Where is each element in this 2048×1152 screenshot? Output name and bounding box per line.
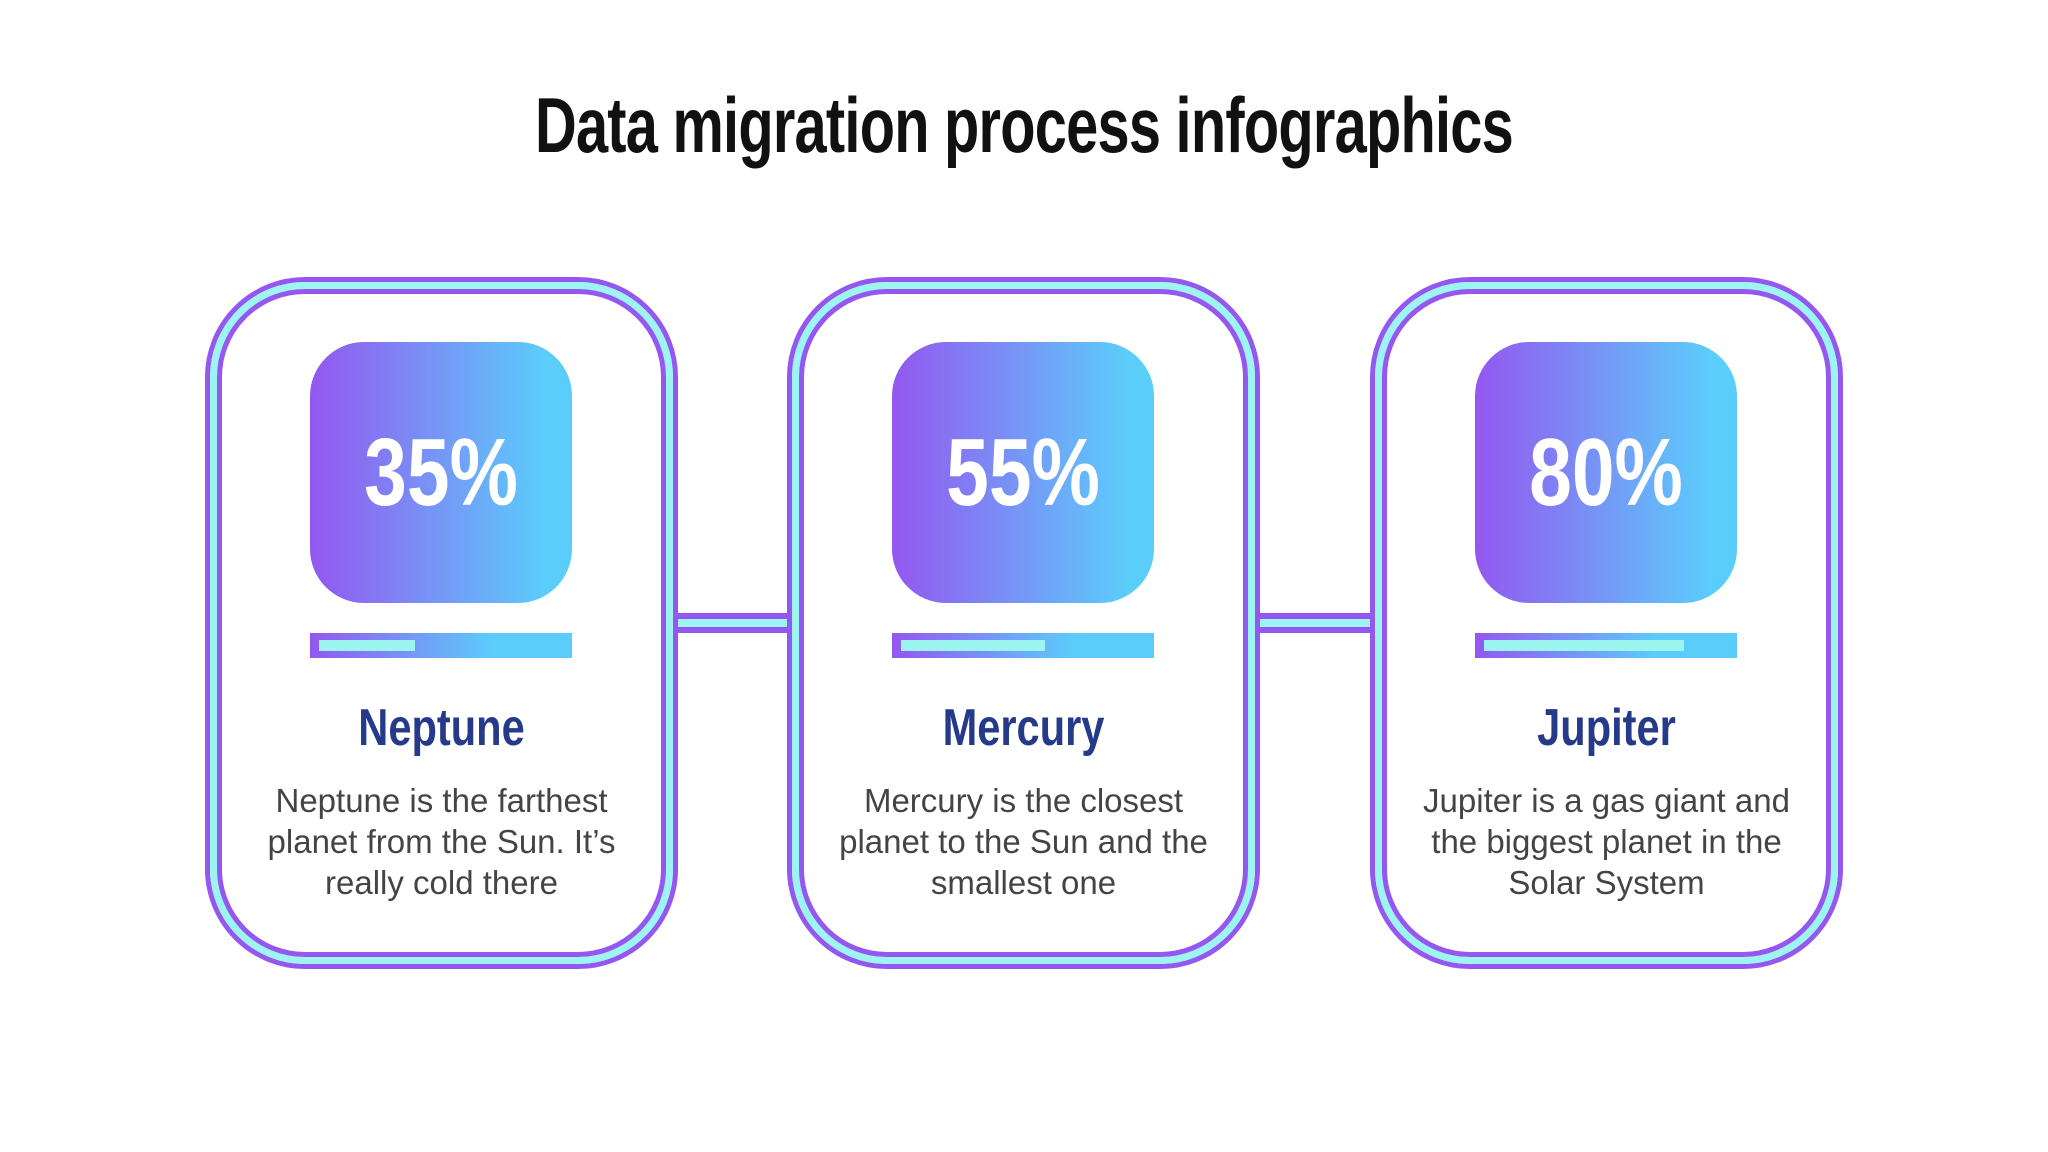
text: Neptune: Neptune is the farthest planet from the Sun. It’s really cold there bbox=[268, 782, 615, 901]
progress bar 55% bbox=[892, 633, 1154, 658]
percent box: 80%: 80% bbox=[1529, 419, 1683, 526]
heading: Mercury: Mercury bbox=[943, 699, 1104, 757]
panel: Neptune bbox=[205, 277, 678, 969]
panel: Jupiter bbox=[1370, 277, 1843, 969]
percent box: 80% bbox=[1475, 342, 1737, 603]
panel: Mercury bbox=[787, 277, 1260, 969]
percent box: 35% bbox=[310, 342, 572, 603]
progress bar 80% bbox=[1475, 633, 1737, 658]
heading: Neptune: Neptune bbox=[358, 699, 525, 757]
connector 1 bbox=[670, 613, 795, 633]
percent box: 35%: 35% bbox=[364, 419, 518, 526]
heading: Jupiter: Jupiter bbox=[1537, 699, 1676, 757]
percent box: 55%: 55% bbox=[946, 419, 1100, 526]
title: Data migration process infographics bbox=[535, 81, 1513, 169]
text: Mercury: Mercury is the closest planet to the Sun and the smallest one bbox=[839, 782, 1208, 901]
progress bar 35% bbox=[310, 633, 572, 658]
connector 2 bbox=[1253, 613, 1378, 633]
text: Jupiter: Jupiter is a gas giant and the biggest planet in the Solar System bbox=[1423, 782, 1790, 901]
percent box: 55% bbox=[892, 342, 1154, 603]
